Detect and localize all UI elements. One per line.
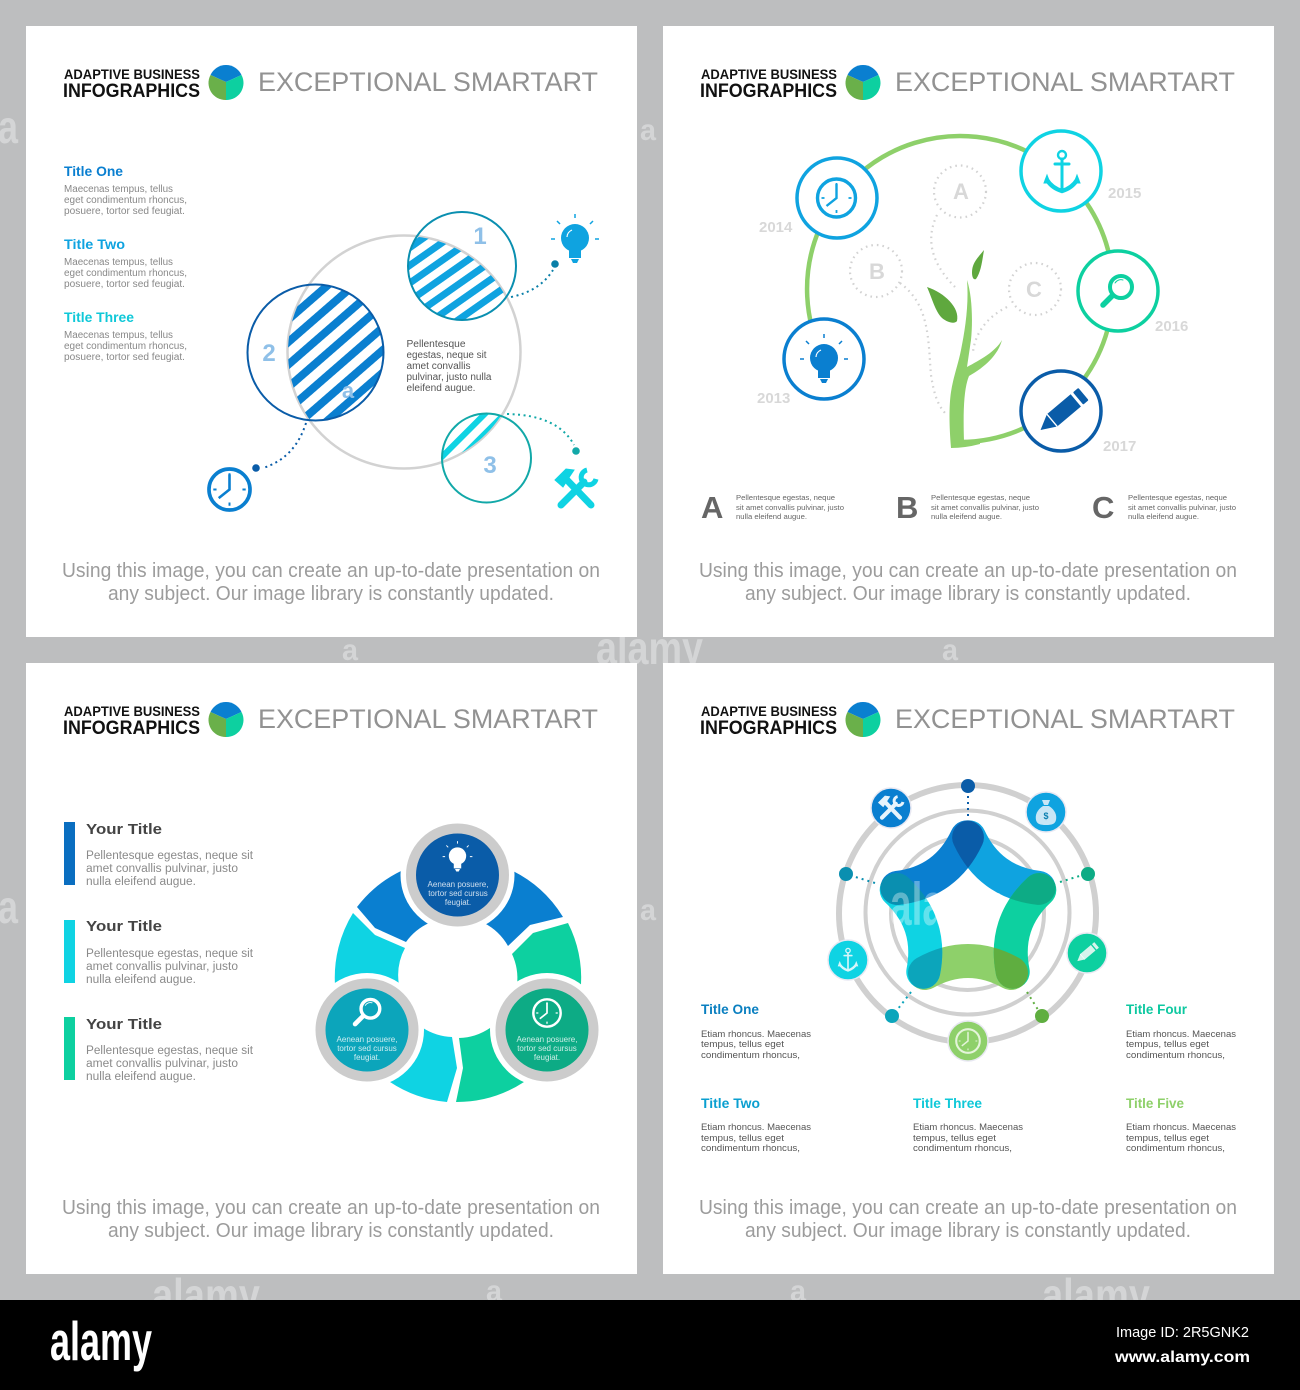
panel 4 footer: Using this image, you can create an up-to-date presentation on (699, 1197, 1237, 1219)
watermark marks on background: alamy (152, 1269, 260, 1321)
hub: bulb: feugiat. (445, 898, 471, 907)
text: title two (701, 1096, 811, 1154)
list item 3 (64, 1016, 254, 1083)
dotted paths to letters (850, 166, 1061, 413)
node 2014 (759, 158, 877, 238)
title list: Title Two (64, 237, 125, 252)
text: title one (701, 1002, 811, 1061)
venn diagram: 2 (262, 340, 276, 367)
text: title four: tempus, tellus eget (1126, 1039, 1209, 1050)
panel 4 footer: any subject. Our image library is constantly updated. (745, 1220, 1191, 1242)
text: title five: condimentum rhoncus, (1126, 1143, 1225, 1154)
title list: Title One (64, 164, 124, 179)
stock photo footer bar: Image ID: 2R5GNK2 (1116, 1324, 1249, 1341)
panel 2 footer: any subject. Our image library is constantly updated. (745, 583, 1191, 605)
connector: circle 3 to tools (507, 414, 580, 455)
icon badge: clock (948, 1021, 988, 1061)
list item 2: Pellentesque egestas, neque sit (86, 948, 254, 960)
hub: bulb (400, 818, 514, 932)
panel 2 footer: Using this image, you can create an up-to-date presentation on (699, 560, 1237, 582)
panel 3 header: INFOGRAPHICS (63, 718, 200, 739)
hub: bulb: tortor sed cursus (428, 889, 488, 898)
legend A: sit amet convallis pulvinar, justo (736, 503, 844, 512)
watermark marks on background: a (942, 634, 958, 667)
list item 2: amet convallis pulvinar, justo (86, 961, 238, 973)
node 2014: 2014 (759, 219, 793, 236)
hub: clock: Aenean posuere, (517, 1035, 577, 1044)
text: title two: condimentum rhoncus, (701, 1143, 800, 1154)
panel 1 footer: Using this image, you can create an up-to-date presentation on (62, 560, 600, 582)
node 2016 (1078, 251, 1188, 335)
list item 2: Your Title (86, 918, 162, 935)
panel: tree timeline (663, 26, 1274, 637)
letters in dotted circles: A (953, 179, 969, 204)
watermark marks on background (0, 101, 1150, 1321)
text: title one: Title One (701, 1002, 759, 1017)
text: title one: Etiam rhoncus. Maecenas (701, 1029, 811, 1040)
panel 3 header: ADAPTIVE BUSINESS (64, 704, 200, 719)
hub: magnifier (310, 973, 424, 1087)
venn diagram: 3 (483, 452, 497, 479)
panel: star and orbits (663, 663, 1274, 1274)
centre text: Pellentesque (406, 339, 466, 350)
title list: eget condimentum rhoncus, (64, 195, 187, 206)
text: title three: tempus, tellus eget (913, 1133, 996, 1144)
icon: clock (209, 469, 250, 510)
text: title four (1126, 1002, 1236, 1061)
panel 4 header: INFOGRAPHICS (700, 718, 837, 739)
tree (927, 250, 1002, 448)
text: title three: Title Three (913, 1096, 982, 1111)
text: title five: tempus, tellus eget (1126, 1133, 1209, 1144)
panel 1 header (63, 65, 598, 102)
stock photo footer bar (0, 1300, 1300, 1390)
node 2013: 2013 (757, 390, 790, 407)
text: title three: Etiam rhoncus. Maecenas (913, 1122, 1023, 1133)
legend B: Pellentesque egestas, neque (931, 493, 1030, 502)
text: title three: condimentum rhoncus, (913, 1143, 1012, 1154)
hub: magnifier: Aenean posuere, (337, 1035, 397, 1044)
legend A: A (701, 490, 723, 525)
watermark marks on background: alamy (596, 622, 703, 674)
text: title two: tempus, tellus eget (701, 1133, 784, 1144)
legend B: nulla eleifend augue. (931, 512, 1002, 521)
legend B: B (896, 490, 918, 525)
list item 1: nulla eleifend augue. (86, 876, 196, 888)
panel 1 header: ADAPTIVE BUSINESS (64, 67, 200, 82)
panel 3 footer: any subject. Our image library is constantly updated. (108, 1220, 554, 1242)
hub: bulb: Aenean posuere, (428, 880, 488, 889)
node 2017: 2017 (1103, 438, 1136, 455)
watermark marks on background: a (790, 1275, 806, 1308)
node 2015 (1021, 131, 1141, 211)
letters in dotted circles (869, 179, 1042, 302)
node 2017 (1021, 371, 1136, 455)
legend C: sit amet convallis pulvinar, justo (1128, 503, 1236, 512)
title list: Title Three (64, 310, 134, 325)
watermark marks on background: a (486, 1275, 502, 1308)
letters in dotted circles: C (1026, 277, 1042, 302)
panel 1 header: INFOGRAPHICS (63, 81, 200, 102)
list item 2 (64, 918, 254, 986)
venn diagram: 1 (473, 223, 487, 250)
panel: segmented ring (26, 663, 637, 1274)
panel: overlapping circles (26, 26, 637, 637)
icon badge: money bag: $ (1043, 811, 1049, 821)
watermark marks on background: a (342, 634, 358, 667)
list item 1 (64, 821, 254, 888)
panel 2 header: INFOGRAPHICS (700, 81, 837, 102)
title list: Maecenas tempus, tellus (64, 257, 173, 268)
hub: magnifier: tortor sed cursus (337, 1044, 397, 1053)
dotted connectors (849, 790, 1086, 1014)
connector: circle 1 to bulb (511, 260, 559, 297)
centre text: eleifend augue. (406, 383, 476, 394)
legend A: nulla eleifend augue. (736, 512, 807, 521)
icon badge: pencil (1067, 933, 1107, 973)
text: title one: tempus, tellus eget (701, 1039, 784, 1050)
text: title four: Title Four (1126, 1002, 1188, 1017)
panel 1 footer: any subject. Our image library is constantly updated. (108, 583, 554, 605)
legend B (896, 490, 1039, 525)
list item 3: nulla eleifend augue. (86, 1071, 196, 1083)
title list: posuere, tortor sed feugiat. (64, 279, 185, 290)
panel 2 header: ADAPTIVE BUSINESS (701, 67, 837, 82)
list item 3: Pellentesque egestas, neque sit (86, 1045, 254, 1057)
panel 3 footer: Using this image, you can create an up-to-date presentation on (62, 1197, 600, 1219)
node 2015: 2015 (1108, 185, 1141, 202)
letters in dotted circles: B (869, 259, 885, 284)
panel 3 footer (62, 1197, 600, 1242)
list item 1: Pellentesque egestas, neque sit (86, 850, 254, 862)
panel 3 header: EXCEPTIONAL SMARTART (258, 704, 598, 734)
list item 1: amet convallis pulvinar, justo (86, 863, 238, 875)
centre text: pulvinar, justo nulla (406, 372, 492, 383)
title list: posuere, tortor sed feugiat. (64, 206, 185, 217)
title list: eget condimentum rhoncus, (64, 341, 187, 352)
list item 2: nulla eleifend augue. (86, 974, 196, 986)
orbit rings (839, 785, 1096, 1042)
text: title one: condimentum rhoncus, (701, 1050, 800, 1061)
node 2016: 2016 (1155, 318, 1188, 335)
stock photo footer bar: www.alamy.com (1114, 1349, 1250, 1366)
text: title five: Title Five (1126, 1096, 1184, 1111)
hub: clock: feugiat. (534, 1053, 560, 1062)
text: title five: Etiam rhoncus. Maecenas (1126, 1122, 1236, 1133)
icon: tools (555, 469, 596, 505)
legend C: nulla eleifend augue. (1128, 512, 1199, 521)
centre text: egestas, neque sit (406, 350, 487, 361)
text: title five (1126, 1096, 1236, 1154)
text: title three (913, 1096, 1023, 1154)
title list: posuere, tortor sed feugiat. (64, 352, 185, 363)
legend A: Pellentesque egestas, neque (736, 493, 835, 502)
list item 3: Your Title (86, 1016, 162, 1033)
title list (64, 164, 187, 363)
node 2013 (757, 319, 864, 407)
text: title two: Title Two (701, 1096, 760, 1111)
icon badge: money bag (1026, 792, 1066, 832)
venn diagram (240, 200, 535, 505)
hub: clock: tortor sed cursus (517, 1044, 577, 1053)
title list: eget condimentum rhoncus, (64, 268, 187, 279)
ring segments (335, 871, 581, 1102)
connector: circle 2 to clock (252, 423, 306, 472)
legend C: C (1092, 490, 1114, 525)
list item 1: Your Title (86, 821, 162, 838)
icon: bulb (551, 214, 599, 263)
panel 4 header (700, 702, 1235, 739)
legend A (701, 490, 844, 525)
panel 2 header (700, 65, 1235, 102)
stock photo footer bar: alamy (50, 1310, 152, 1372)
legend C: Pellentesque egestas, neque (1128, 493, 1227, 502)
panel 2 header: EXCEPTIONAL SMARTART (895, 67, 1235, 97)
text: title two: Etiam rhoncus. Maecenas (701, 1122, 811, 1133)
venn diagram: a (342, 378, 355, 403)
legend C (1092, 490, 1236, 525)
hub: magnifier: feugiat. (354, 1053, 380, 1062)
panel 4 header: ADAPTIVE BUSINESS (701, 704, 837, 719)
panel 3 header (63, 702, 598, 739)
star petals (897, 837, 1039, 973)
title list: Maecenas tempus, tellus (64, 330, 173, 341)
list item 3: amet convallis pulvinar, justo (86, 1058, 238, 1070)
title list: Maecenas tempus, tellus (64, 184, 173, 195)
panel 4 footer (699, 1197, 1237, 1242)
watermark on star: alamy (890, 871, 1000, 938)
icon badge: tools (871, 788, 911, 828)
text: title four: Etiam rhoncus. Maecenas (1126, 1029, 1236, 1040)
panel 2 footer (699, 560, 1237, 605)
watermark marks on background: alamy (1042, 1269, 1150, 1321)
watermark marks on background: a (640, 894, 656, 927)
panel 4 header: EXCEPTIONAL SMARTART (895, 704, 1235, 734)
panel 1 footer (62, 560, 600, 605)
green ring (807, 136, 1113, 442)
watermark marks on background: a (640, 114, 656, 147)
centre text: amet convallis (406, 361, 470, 372)
orbit dots (839, 779, 1095, 1023)
text: title four: condimentum rhoncus, (1126, 1050, 1225, 1061)
icon badge: anchor (828, 940, 868, 980)
panel 1 header: EXCEPTIONAL SMARTART (258, 67, 598, 97)
legend B: sit amet convallis pulvinar, justo (931, 503, 1039, 512)
centre text (406, 339, 492, 394)
hub: clock (490, 973, 604, 1087)
